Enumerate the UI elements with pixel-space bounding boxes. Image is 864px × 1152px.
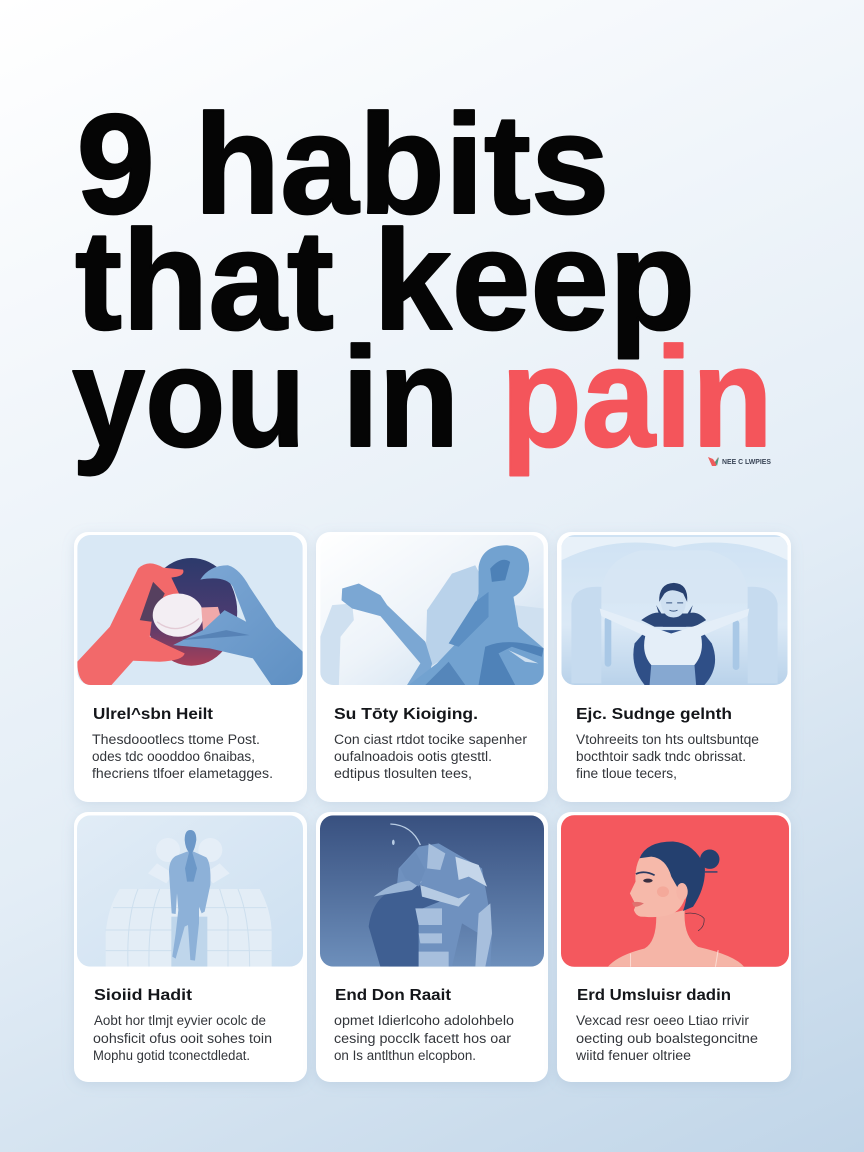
illustration: person with arms spread bbox=[562, 535, 788, 685]
card 1 body text bbox=[92, 732, 273, 781]
card 4 body text: oohsficit ofus ooit sohes toin bbox=[93, 1031, 272, 1046]
illustration: person stretching arm bbox=[320, 535, 544, 685]
card 2 body text: Con ciast rtdot tocike sapenher bbox=[334, 732, 528, 747]
card 2 body text: edtipus tlosulten tees, bbox=[334, 766, 472, 781]
card 1 body text: odes tdc oooddoo 6naibas, bbox=[92, 749, 255, 764]
panel: card 3 bbox=[557, 532, 791, 802]
card 4 body text bbox=[93, 1013, 272, 1063]
card 4 body text: Aobt hor tlmjt eyvier ocolc de bbox=[94, 1013, 266, 1028]
illustration: two hands holding a sphere bbox=[77, 535, 303, 685]
card 2 heading: Su Tōty Kioiging. bbox=[334, 706, 478, 723]
panel: card 6 bbox=[557, 812, 791, 1082]
card 3 body text bbox=[576, 732, 759, 781]
panel: card 5 bbox=[316, 812, 548, 1082]
card 5 heading: End Don Raait bbox=[335, 987, 452, 1004]
card 6 body text bbox=[575, 1013, 758, 1063]
illustration: woman in profile bbox=[561, 815, 789, 967]
panel: card 2 bbox=[316, 532, 548, 802]
card 5 body text: cesing pocclk facett hos oar bbox=[334, 1031, 512, 1046]
card 1 body text: fhecriens tlfoer elametagges. bbox=[92, 766, 273, 781]
card 3 heading: Ejc. Sudnge gelnth bbox=[576, 706, 732, 723]
title: you in bbox=[72, 317, 459, 476]
card 1 body text: Thesdoootlecs ttome Post. bbox=[92, 732, 260, 747]
card 2 body text: oufalnoadois ootis gtesttl. bbox=[334, 749, 492, 764]
card 3 body text: fine tloue tecers, bbox=[576, 766, 677, 781]
card 5 body text: opmet Idierlcoho adolohbelo bbox=[334, 1013, 514, 1028]
card 5 body text bbox=[334, 1013, 514, 1063]
card 6 body text: Vexcad resr oeeo Ltiao rrivir bbox=[576, 1013, 750, 1028]
panel: card 4 bbox=[74, 812, 307, 1082]
card 5 body text: on Is antlthun elcopbon. bbox=[334, 1048, 476, 1063]
title: that keep bbox=[75, 202, 695, 360]
card 6 body text: oecting oub boalstegoncitne bbox=[576, 1031, 758, 1046]
card 4 body text: Mophu gotid tconectdledat. bbox=[93, 1048, 250, 1063]
title: 9 habits bbox=[76, 85, 609, 243]
card 2 body text bbox=[334, 732, 528, 781]
card 1 heading: Ulrel^sbn Heilt bbox=[93, 706, 214, 723]
card 3 body text: Vtohreeits ton hts oultsbuntqe bbox=[576, 732, 759, 747]
illustration: figure holding shoulder bbox=[320, 815, 544, 967]
infographic canvas bbox=[72, 109, 793, 1086]
title bbox=[72, 85, 773, 477]
card 4 heading: Sioiid Hadit bbox=[94, 987, 193, 1004]
title: pain bbox=[501, 319, 773, 477]
card 3 body text: bocthtoir sadk tndc obrissat. bbox=[576, 749, 746, 764]
card 6 body text: wiitd fenuer oltriee bbox=[575, 1048, 691, 1063]
panel: card 1 bbox=[74, 532, 307, 802]
small brand mark: NEE C LWPIES bbox=[722, 457, 771, 466]
illustration: standing figure over grid dome bbox=[77, 816, 303, 967]
card 6 heading: Erd Umsluisr dadin bbox=[577, 987, 731, 1004]
